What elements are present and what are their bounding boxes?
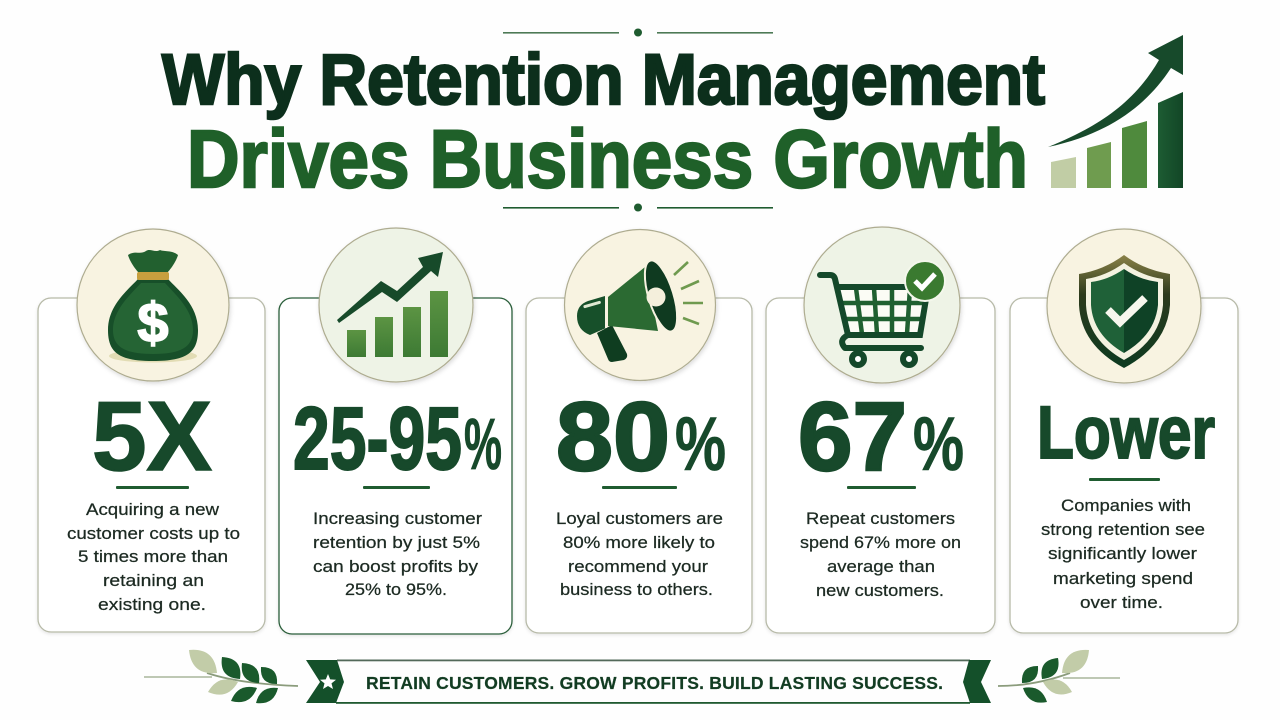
- description: Acquiring a new: [86, 500, 220, 519]
- card frame: [1010, 298, 1238, 633]
- title line 2: Drives Business Growth: [187, 114, 1028, 205]
- description: Companies with: [1061, 496, 1191, 515]
- icon: left laurel sprig: [144, 643, 298, 708]
- description: over time.: [1080, 593, 1163, 612]
- panel: 5X acquisition cost: [38, 229, 265, 632]
- description: marketing spend: [1053, 569, 1193, 588]
- description: recommend your: [568, 557, 708, 576]
- title block: [162, 28, 1045, 212]
- ribbon: [306, 660, 991, 704]
- slogan: RETAIN CUSTOMERS. GROW PROFITS. BUILD LASTING SUCCESS.: [366, 673, 943, 693]
- stat: 67%: 67: [798, 382, 907, 491]
- top ornament: [503, 28, 773, 36]
- card frame: [279, 298, 512, 634]
- panel: 25-95% profits: [279, 228, 512, 634]
- divider: [363, 486, 430, 489]
- stat: 80%: %: [675, 402, 726, 487]
- description: [67, 500, 240, 614]
- divider: [1089, 478, 1160, 481]
- stat: Lower: Lower: [1037, 391, 1215, 474]
- description: can boost profits by: [313, 557, 479, 576]
- icon: star: [320, 674, 336, 689]
- icon: bar chart with arrow: [319, 228, 473, 382]
- footer banner: [144, 643, 1120, 708]
- icon: megaphone: [564, 230, 716, 380]
- card frame: [38, 298, 265, 632]
- description: Repeat customers: [806, 509, 955, 528]
- description: Loyal customers are: [556, 509, 723, 528]
- stat: 25-95%: 25-95: [293, 388, 462, 488]
- icon: shopping cart: [804, 227, 960, 383]
- description: 25% to 95%.: [345, 580, 447, 599]
- description: [800, 509, 961, 600]
- description: [313, 509, 482, 599]
- stat: 67%: [798, 382, 964, 491]
- card frame: [526, 298, 752, 633]
- stat: 5X: 5X: [92, 381, 212, 491]
- stat: 80%: [556, 382, 726, 491]
- description: average than: [827, 557, 935, 576]
- description: retention by just 5%: [313, 533, 480, 552]
- panel: 67% spending: [766, 227, 995, 633]
- description: 80% more likely to: [563, 533, 715, 552]
- stat: 80%: 80: [556, 382, 670, 491]
- icon: money bag: [77, 229, 229, 381]
- icon: right laurel sprig: [998, 643, 1120, 707]
- title line 1: Why Retention Management: [162, 41, 1045, 120]
- divider: [847, 486, 916, 489]
- divider: [116, 486, 189, 489]
- description: [1041, 496, 1205, 612]
- description: strong retention see: [1041, 520, 1205, 539]
- icon: growth chart with arrow: [1048, 35, 1183, 188]
- icon: shield with check: [1047, 229, 1201, 383]
- stat: 25-95%: %: [464, 405, 502, 485]
- stat: 67%: %: [913, 402, 964, 487]
- bottom ornament: [503, 204, 773, 212]
- panel: lower marketing spend: [1010, 229, 1238, 633]
- description: existing one.: [98, 595, 206, 614]
- description: spend 67% more on: [800, 533, 961, 552]
- description: retaining an: [103, 571, 204, 590]
- description: customer costs up to: [67, 524, 240, 543]
- description: Increasing customer: [313, 509, 482, 528]
- description: 5 times more than: [78, 547, 228, 566]
- description: significantly lower: [1048, 544, 1197, 563]
- icon: money bag: $: [137, 291, 169, 354]
- divider: [602, 486, 677, 489]
- description: [556, 509, 723, 599]
- panel: 80% referrals: [526, 230, 752, 633]
- description: new customers.: [816, 581, 944, 600]
- description: business to others.: [560, 580, 713, 599]
- card frame: [766, 298, 995, 633]
